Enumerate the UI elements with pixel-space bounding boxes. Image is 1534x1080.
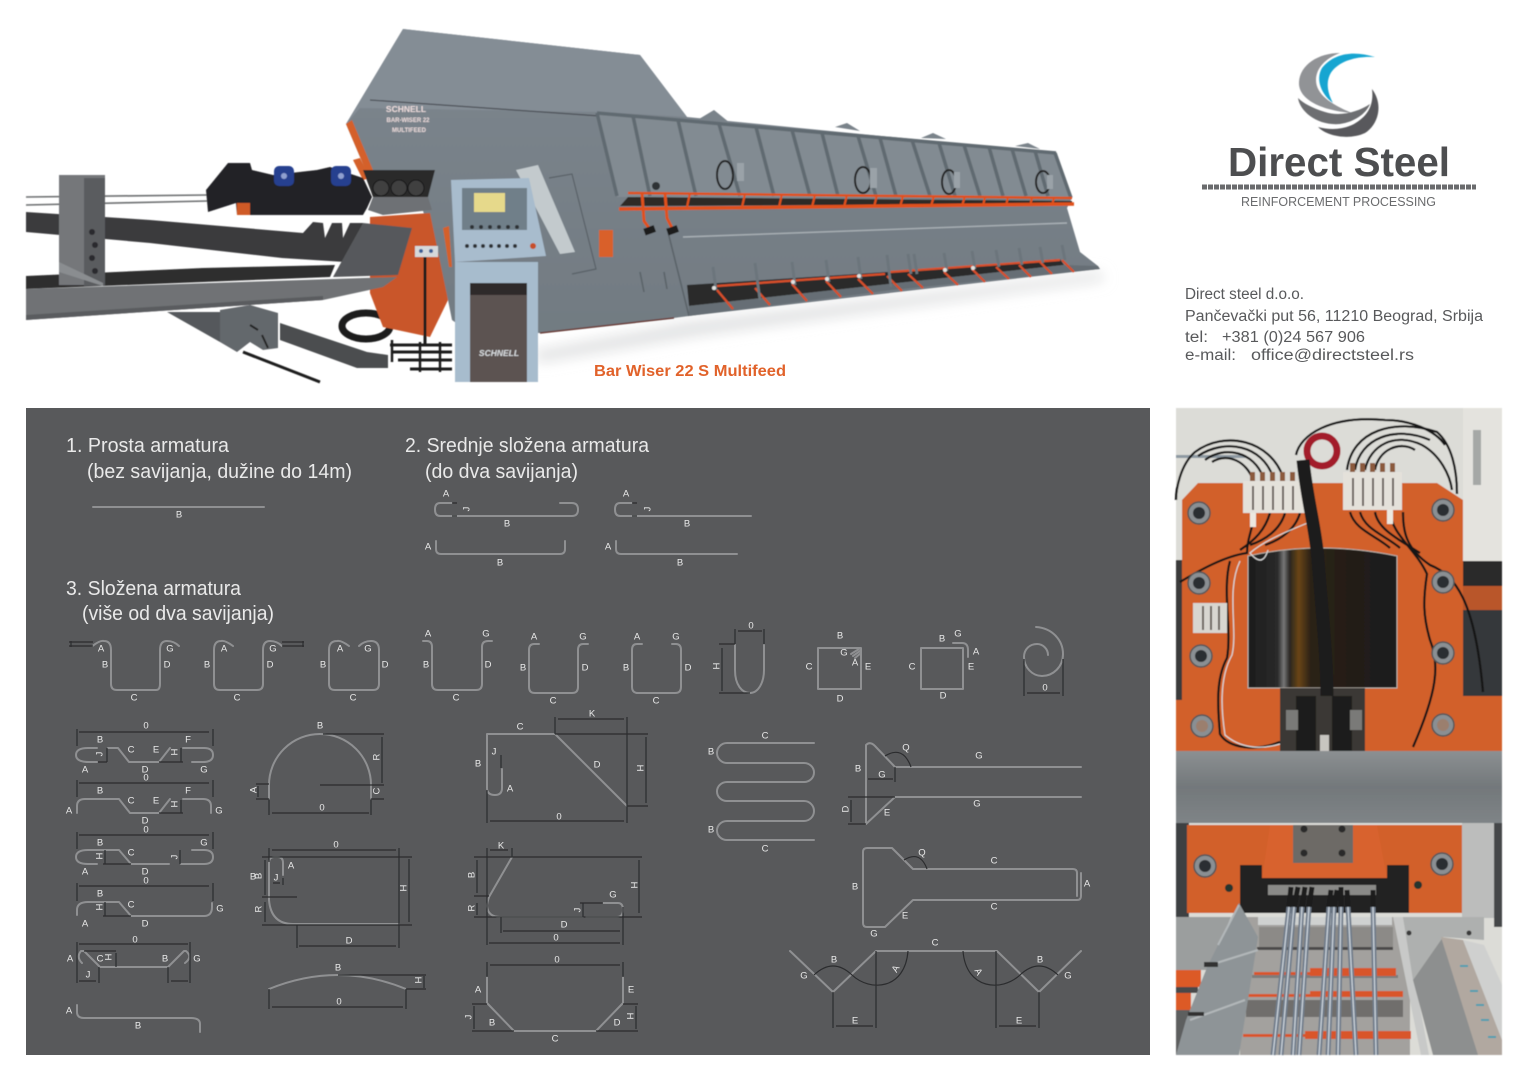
tagline: REINFORCEMENT PROCESSING xyxy=(1241,194,1436,209)
shape: stirrup outward hooks: A xyxy=(98,644,105,654)
shape: hairpin: 0 xyxy=(748,620,754,632)
wordmark: Direct Steel xyxy=(1228,139,1450,185)
terminal block right xyxy=(1343,463,1402,524)
shape: serpentine: C xyxy=(762,844,769,854)
shape: square stirrup 1: D xyxy=(837,694,844,704)
shape: tray with angled ends: 0 xyxy=(132,934,138,946)
shape: single crank with end bends: A xyxy=(82,918,89,930)
shape: stirrup mixed hooks: D xyxy=(267,660,274,670)
shape: shallow arc xyxy=(269,962,426,1009)
shape: rounded corner with hook: D xyxy=(346,936,353,946)
shape: diagonal closed bar: C xyxy=(517,722,524,732)
center wedge xyxy=(1262,825,1387,878)
shape: rounded corner with hook xyxy=(250,840,412,948)
center mechanism notch xyxy=(1280,688,1365,751)
shape: stirrup outward hooks: G xyxy=(166,644,174,654)
shape: U with outward ends xyxy=(423,628,492,704)
shape: T-head loop: G xyxy=(870,928,878,940)
shape: U with mixed ends: C xyxy=(550,696,557,706)
orange rear strip xyxy=(353,158,370,180)
shape: spiral: 0 xyxy=(1042,682,1048,694)
shape: square stirrup 1: B xyxy=(837,630,843,642)
shape: T-head loop: Q xyxy=(918,848,926,858)
shape: stirrup inward hooks xyxy=(320,641,389,704)
heading 2 xyxy=(405,435,650,483)
shape: double hook bar: J xyxy=(462,506,472,511)
shape: single hook bar: J xyxy=(642,506,654,511)
shape: square stirrup 2: A xyxy=(973,646,980,658)
shape: diagonal closed bar: A xyxy=(507,784,514,794)
shape: rounded corner with hook: A xyxy=(288,860,295,872)
shape: angled bar with end hook: J xyxy=(572,907,584,912)
orange manifold rail xyxy=(619,193,1074,235)
shape: angled bar with end hook: B xyxy=(466,872,478,878)
shape: double V bar: G xyxy=(1064,970,1072,982)
shape: single crank with hooks: B xyxy=(97,838,103,848)
lower orange plate xyxy=(1187,825,1462,913)
terminal block small xyxy=(1193,603,1227,633)
shape: serpentine xyxy=(708,730,814,854)
shape: closed U stirrup: G xyxy=(672,632,680,642)
heading 3 xyxy=(66,578,274,625)
shape: chamfered tray: 0 xyxy=(554,954,560,966)
shape: single crank with end bends: 0 xyxy=(143,876,149,886)
floor cable chain xyxy=(342,313,452,372)
shape: single crank with hooks xyxy=(76,824,213,878)
shape: single crank with end bends: H xyxy=(94,903,106,910)
straightening rollers xyxy=(363,170,435,215)
shape: tray with angled ends: A xyxy=(67,954,74,964)
shape: diagonal closed bar: K xyxy=(589,708,596,720)
logo mark swirl xyxy=(1298,53,1378,137)
shape: chamfered tray xyxy=(464,954,638,1044)
heading 2: (do dva savijanja) xyxy=(425,461,578,483)
contact details: Pančevački put 56, 11210 Beograd, Srbija xyxy=(1185,308,1483,325)
shape: shallow arc: 0 xyxy=(336,996,342,1008)
housing bottom edge xyxy=(540,318,674,333)
shape: U with mixed ends xyxy=(520,632,589,706)
shape: shallow arc: B xyxy=(335,962,341,974)
shape: cranked bar with hooks: G xyxy=(200,764,208,776)
shape: diagonal closed bar: H xyxy=(636,764,646,771)
shape: angled bar with end hook: K xyxy=(498,840,505,852)
shape: diagonal closed bar: D xyxy=(594,760,601,770)
shape: rounded corner with hook: H xyxy=(398,884,410,891)
contact details: tel: xyxy=(1185,329,1208,346)
shape: cranked bar with end bends: H xyxy=(170,800,180,807)
shape: cranked bar with hooks: D xyxy=(142,764,149,776)
shape: angled bar with end hook: 0 xyxy=(553,932,559,944)
shape: arch: R xyxy=(372,753,382,760)
shape: square stirrup 1 xyxy=(806,630,871,704)
shape: single crank with end bends: B xyxy=(97,888,103,900)
shape: square stirrup 2: E xyxy=(968,662,974,672)
infeed frame beam xyxy=(26,223,412,320)
shape: cranked bar with hooks: J xyxy=(94,751,106,756)
shape: stirrup outward hooks xyxy=(69,641,179,704)
orange top plate xyxy=(1176,483,1502,751)
lower background xyxy=(1462,823,1502,918)
shape: U with outward ends: G xyxy=(482,628,490,640)
SCHNELL plate: MULTIFEED xyxy=(392,128,427,134)
shape: tray with angled ends: G xyxy=(193,954,201,964)
shape: triangular fork: B xyxy=(855,764,861,774)
shape: single end bend: B xyxy=(677,558,683,568)
shape: single crank with hooks: 0 xyxy=(143,824,149,836)
shape: chamfered tray: E xyxy=(628,984,634,996)
photo: bending head close-up xyxy=(1176,408,1502,1055)
shape: single crank with end bends xyxy=(77,876,224,930)
shape: cranked bar with hooks: 0 xyxy=(143,720,149,732)
blue gear motors xyxy=(274,166,351,186)
shape: double hook bar: A xyxy=(443,488,450,500)
shape: single crank with hooks: C xyxy=(128,848,135,858)
shape: square stirrup 2: G xyxy=(954,628,962,640)
shape: single crank with hooks: D xyxy=(142,866,149,878)
shape: triangular fork: Q xyxy=(902,742,910,754)
shape: rounded corner with hook: J xyxy=(274,872,279,884)
shape: chamfered tray: C xyxy=(552,1034,559,1044)
main machine housing xyxy=(346,29,1100,333)
shape: U with mixed ends: B xyxy=(520,662,526,674)
shape: straight bar: B xyxy=(176,510,182,520)
shape: square stirrup 2: B xyxy=(939,634,945,644)
shape: stirrup inward hooks: C xyxy=(350,692,357,704)
SCHNELL plate xyxy=(386,104,430,134)
orange pedestal column xyxy=(370,213,448,337)
shape: diagonal closed bar: B xyxy=(475,758,481,770)
shape: U with outward ends: B xyxy=(423,660,429,670)
red lifting eye xyxy=(1307,436,1337,466)
shape: single hook bar xyxy=(615,488,751,530)
shape: cranked bar with end bends: E xyxy=(153,796,159,806)
shape: double V bar: G xyxy=(800,970,808,982)
shape: triangular fork: G xyxy=(878,770,886,780)
pedal box stand xyxy=(415,246,438,345)
shape: double end bend: A xyxy=(425,542,432,552)
shape: single crank with end bends: C xyxy=(128,900,135,910)
black solenoid window xyxy=(1248,548,1397,688)
shape: single crank with hooks: H xyxy=(94,852,106,859)
housing top face xyxy=(346,29,687,124)
shape: arch: C xyxy=(372,787,382,794)
terminal block left xyxy=(1243,472,1305,527)
shape: angled bar with end hook: G xyxy=(609,890,617,900)
shape: cranked bar with hooks: C xyxy=(128,744,135,756)
dark infeed bars xyxy=(26,212,363,262)
shape: chamfered tray: B xyxy=(489,1018,495,1028)
shape: double V bar: C xyxy=(932,938,939,948)
shape: arch: 0 xyxy=(319,802,325,814)
shape: serpentine: B xyxy=(708,746,714,758)
shape: angled bar with end hook: H xyxy=(630,881,640,888)
shape: serpentine: B xyxy=(708,824,714,836)
shape: spiral xyxy=(1024,627,1063,696)
contact details: +381 (0)24 567 906 xyxy=(1222,329,1365,346)
shape: square stirrup 1: G xyxy=(840,648,848,658)
shape: U with outward ends: D xyxy=(485,660,492,670)
steel rods xyxy=(1273,887,1376,1055)
vertical bar support post xyxy=(59,175,105,286)
shape: tray with angled ends: B xyxy=(162,954,168,964)
orange warning plate xyxy=(599,230,613,257)
tool flap xyxy=(516,165,575,254)
shape: closed U stirrup: B xyxy=(623,662,629,674)
shape: triangular fork: G xyxy=(975,750,983,762)
shape: chamfered tray: H xyxy=(626,1012,636,1019)
shape: cranked bar with end bends: B xyxy=(97,786,103,796)
shape: serpentine: C xyxy=(762,730,769,742)
heading 1: (bez savijanja, dužine do 14m) xyxy=(87,461,352,483)
shape: single crank with hooks: A xyxy=(82,866,89,878)
shape: double V bar xyxy=(790,938,1081,1028)
shape: double hook bar: B xyxy=(504,518,510,530)
shape: stirrup inward hooks: G xyxy=(364,644,372,654)
shape: cranked bar with end bends xyxy=(66,772,223,826)
shape: closed U stirrup: D xyxy=(685,662,692,674)
machine photo: Bar Wiser 22 S Multifeed xyxy=(26,29,1105,382)
shape: bar with two bends: B xyxy=(135,1020,141,1032)
heading 1: 1. Prosta armatura xyxy=(66,435,230,457)
shape: U with mixed ends: G xyxy=(579,632,587,642)
shape: rounded corner with hook: R xyxy=(254,905,264,912)
shape: cranked bar with end bends: D xyxy=(142,816,149,826)
SCHNELL plate: BAR-WISER 22 xyxy=(386,118,430,124)
housing door seams xyxy=(640,228,689,316)
table right side xyxy=(1393,917,1502,1055)
shape: double end bend xyxy=(425,541,565,568)
black control wires xyxy=(1176,419,1483,748)
shape: cranked bar with end bends: F xyxy=(185,786,191,796)
shape: diagonal closed bar: 0 xyxy=(556,812,562,822)
shape: double hook bar xyxy=(435,488,578,530)
shape: chamfered tray: D xyxy=(614,1018,621,1028)
shape: square stirrup 2: D xyxy=(940,690,947,702)
rebar rule xyxy=(1202,184,1476,190)
bar drop slot and orange fingers xyxy=(687,245,1100,316)
shape: square stirrup 2: C xyxy=(909,662,916,672)
shape: cranked bar with end bends: 0 xyxy=(143,772,149,784)
contact details: e-mail: xyxy=(1185,347,1236,364)
shape: cranked bar with hooks xyxy=(76,720,213,776)
shape: chamfered tray: A xyxy=(475,984,482,996)
rear feed rods xyxy=(26,195,207,205)
shape: arch xyxy=(248,720,384,815)
feeder head xyxy=(206,163,372,215)
shape: double end bend: B xyxy=(497,558,503,568)
lower panel groove xyxy=(683,223,1067,237)
contact details: Direct steel d.o.o. xyxy=(1185,286,1304,303)
shape: rounded corner with hook: B xyxy=(250,872,256,882)
beam ribs xyxy=(597,113,1071,198)
shape: chamfered tray: J xyxy=(464,1014,474,1019)
shape: cranked bar with hooks: H xyxy=(170,748,180,755)
shape: single end bend: A xyxy=(605,542,612,552)
die block xyxy=(1240,865,1409,913)
bend head motors xyxy=(652,161,1053,194)
shape: single hook bar: A xyxy=(623,488,630,500)
shape: single end bend xyxy=(605,541,737,568)
shape: stirrup outward hooks: B xyxy=(102,660,108,670)
shape: cranked bar with hooks: B xyxy=(97,734,103,746)
shape: hairpin: H xyxy=(712,662,722,669)
shape: cranked bar with end bends: A xyxy=(66,806,73,816)
shape: square stirrup 2 xyxy=(909,628,980,702)
control console: SCHNELL xyxy=(479,348,519,358)
shape: closed U stirrup: C xyxy=(653,696,660,706)
floor shadow xyxy=(530,272,1105,362)
shape: double V bar: A xyxy=(890,963,903,974)
logo: Direct Steel xyxy=(1202,53,1476,209)
heading 3: (više od dva savijanja) xyxy=(82,603,274,625)
shape: T-head loop: B xyxy=(852,882,858,892)
shape: square stirrup 1: E xyxy=(865,662,871,672)
grey crossbeam xyxy=(1176,751,1502,823)
heading 1 xyxy=(66,435,352,483)
shape: angled bar with end hook: D xyxy=(561,920,568,930)
shape: U with mixed ends: D xyxy=(582,662,589,674)
shape: stirrup inward hooks: B xyxy=(320,660,326,670)
shape: double V bar: E xyxy=(1016,1016,1022,1026)
shape: double V bar: A xyxy=(972,967,985,978)
shape: cranked bar with hooks: F xyxy=(185,734,191,746)
orange side strip xyxy=(443,226,452,267)
shape: bar with two bends xyxy=(66,1005,200,1032)
upper beam panel xyxy=(597,113,1072,198)
shape: rounded corner with hook: 0 xyxy=(333,840,339,850)
lower support and arms xyxy=(167,305,388,382)
shape: U with outward ends: C xyxy=(453,692,460,704)
shape: double V bar: E xyxy=(852,1016,858,1026)
lower bolts xyxy=(1194,853,1453,892)
shape: stirrup outward hooks: C xyxy=(131,692,138,704)
shape: diagonal closed bar xyxy=(475,708,648,823)
shape: stirrup outward hooks: D xyxy=(164,660,171,670)
shape: stirrup inward hooks: A xyxy=(337,644,344,654)
shape: square stirrup 1: C xyxy=(806,662,813,672)
orange edge strip xyxy=(346,120,373,171)
shape: stirrup mixed hooks: A xyxy=(221,644,228,654)
black hydraulic hose xyxy=(1303,460,1327,696)
shape: T-head loop xyxy=(852,848,1091,940)
shape: arch: A xyxy=(248,786,260,793)
shape: T-head loop: C xyxy=(991,856,998,866)
shape: shallow arc: H xyxy=(414,976,424,983)
shape: T-head loop: C xyxy=(991,902,998,912)
shape: arch: B xyxy=(317,720,323,732)
table left side xyxy=(1176,903,1258,1055)
shape: rounded corner with hook: B xyxy=(254,873,264,879)
shape: diagonal closed bar: J xyxy=(492,746,497,758)
shape: triangular fork xyxy=(840,742,1081,824)
shape: triangular fork: E xyxy=(884,808,890,818)
beam top brackets xyxy=(699,110,1040,149)
shape: single crank with end bends: D xyxy=(142,918,149,930)
shape: triangular fork: G xyxy=(973,798,981,810)
shape: tray with angled ends: H xyxy=(104,953,114,960)
photo background xyxy=(1176,408,1502,1055)
shape: T-head loop: A xyxy=(1084,878,1091,890)
caption: Bar Wiser 22 S Multifeed xyxy=(594,363,786,380)
shape: U with mixed ends: A xyxy=(531,632,538,642)
bar table xyxy=(1240,917,1411,1055)
shape: double V bar: B xyxy=(1037,954,1043,966)
workshop backdrop xyxy=(1176,408,1502,700)
shape: double V bar: B xyxy=(831,954,837,966)
shape: single crank with hooks: J xyxy=(170,854,180,859)
shape: single hook bar: B xyxy=(684,518,690,530)
shape: cranked bar with end bends: G xyxy=(215,806,223,816)
shape: T-head loop: E xyxy=(902,910,908,922)
shape: stirrup mixed hooks: B xyxy=(204,660,210,670)
shape: stirrup mixed hooks: C xyxy=(234,692,241,704)
contact details: office@directsteel.rs xyxy=(1251,347,1414,364)
contact details xyxy=(1185,286,1483,364)
SCHNELL plate: SCHNELL xyxy=(386,104,426,114)
shape: angled bar with end hook xyxy=(466,840,642,945)
hex bolts xyxy=(1188,499,1454,737)
shape: cranked bar with hooks: A xyxy=(82,764,89,776)
shape: U with outward ends: A xyxy=(425,628,432,640)
shape: cranked bar with end bends: C xyxy=(128,796,135,806)
heading 2: 2. Srednje složena armatura xyxy=(405,435,650,457)
cross rail xyxy=(1258,917,1392,925)
shape: square stirrup 1: A xyxy=(852,658,859,668)
heading 3: 3. Složena armatura xyxy=(66,578,242,600)
shape: stirrup mixed hooks xyxy=(204,641,304,704)
shape: tray with angled ends xyxy=(67,934,201,983)
shape: single crank with hooks: G xyxy=(200,838,208,848)
shape: stirrup inward hooks: D xyxy=(382,660,389,670)
shape: bar with two bends: A xyxy=(66,1006,73,1016)
shape: cranked bar with hooks: E xyxy=(153,744,159,756)
control console xyxy=(451,178,546,382)
shape: triangular fork: D xyxy=(840,805,852,812)
panel: rebar shape catalogue xyxy=(26,408,1150,1055)
shape: tray with angled ends: C xyxy=(97,954,104,964)
shape: closed U stirrup xyxy=(623,632,692,706)
shape: stirrup mixed hooks: G xyxy=(269,644,277,654)
shape: closed U stirrup: A xyxy=(634,632,641,642)
shape: tray with angled ends: J xyxy=(86,970,91,980)
housing seam xyxy=(370,100,600,116)
shape: single crank with end bends: G xyxy=(216,904,224,914)
door panel outlines xyxy=(549,174,596,274)
shape: hairpin xyxy=(712,620,764,693)
mounting plate xyxy=(1293,825,1353,863)
shape: angled bar with end hook: R xyxy=(466,904,478,911)
